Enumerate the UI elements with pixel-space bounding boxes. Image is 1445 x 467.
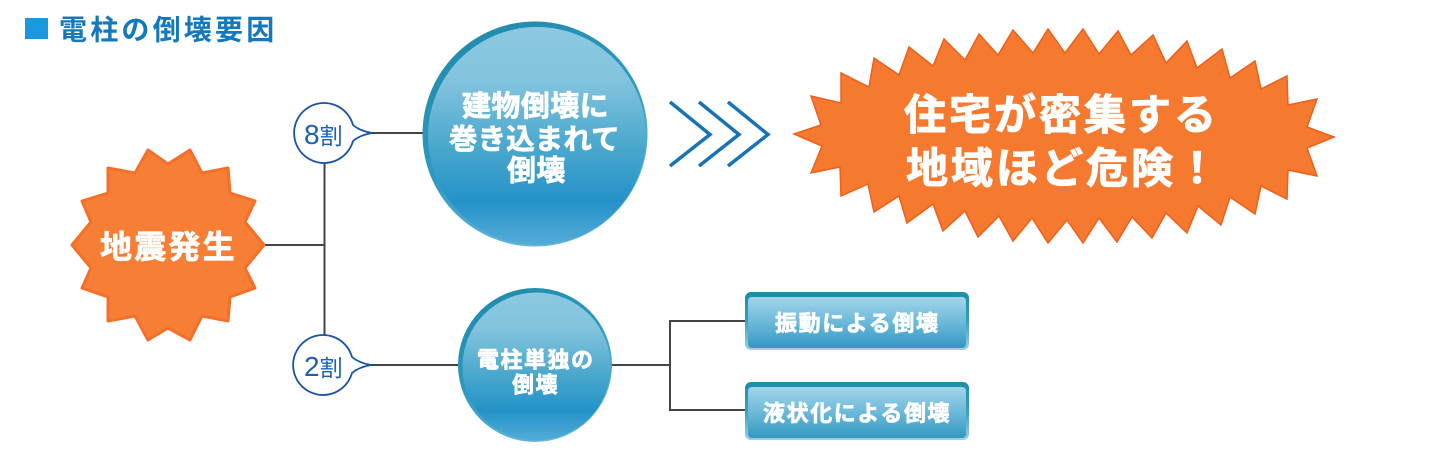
circle text: 倒壊	[512, 372, 559, 398]
arrow: triple chevron	[670, 102, 768, 166]
callout value: 2割	[304, 351, 343, 382]
box: vibration collapse	[745, 292, 969, 350]
circle text: 建物倒壊に	[462, 90, 609, 123]
title	[25, 14, 277, 46]
box text: 振動による倒壊	[775, 311, 940, 336]
callout value: 8割	[304, 119, 343, 150]
circle text: 電柱単独の	[477, 348, 595, 372]
title text: 電柱の倒壊要因	[59, 14, 277, 46]
circle: pole collapse alone	[458, 288, 612, 442]
starburst: earthquake occurs	[72, 150, 264, 340]
circle: collapse with buildings	[422, 22, 648, 246]
circle text: 巻き込まれて	[449, 124, 620, 156]
warning text: 地域ほど危険！	[906, 145, 1221, 192]
starburst: danger warning	[794, 29, 1334, 243]
box: liquefaction collapse	[745, 382, 969, 440]
starburst label: 地震発生	[100, 229, 237, 265]
warning text: 住宅が密集する	[904, 92, 1219, 138]
circle text: 倒壊	[507, 154, 566, 188]
callout: 8割	[294, 103, 372, 163]
box text: 液状化による倒壊	[763, 401, 951, 426]
callout: 2割	[293, 335, 371, 395]
icon: title square	[25, 18, 48, 39]
connector lines	[262, 133, 746, 410]
